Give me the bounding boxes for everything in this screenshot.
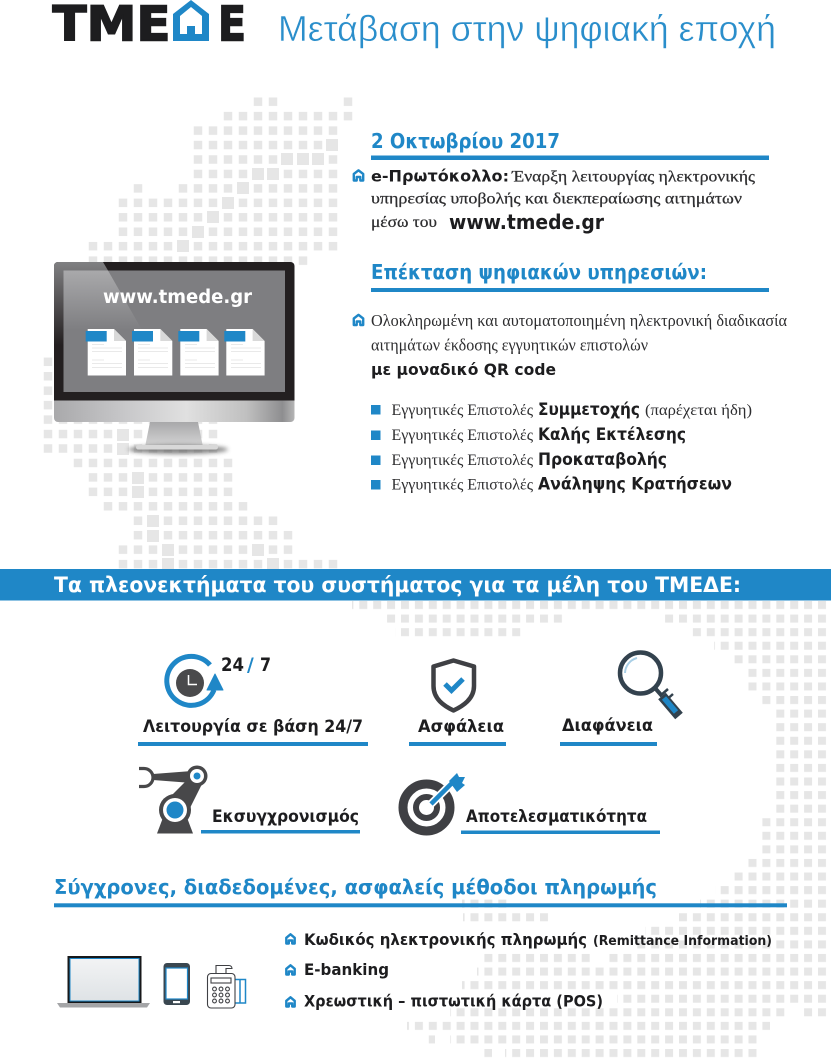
panel: digital services expansion <box>354 260 787 494</box>
document 4 <box>224 329 265 376</box>
list item: advance payment <box>371 450 667 469</box>
list item: participation: Συμμετοχής <box>538 400 640 419</box>
icon: house bullet <box>354 315 363 325</box>
monitor chin <box>54 400 294 422</box>
panel: modernisation <box>139 766 360 834</box>
text: 7: 7 <box>260 655 271 676</box>
heading: payment methods <box>54 875 787 907</box>
panel: 24/7 operation <box>138 655 368 746</box>
monitor address: www.tmede.gr <box>103 287 253 308</box>
list item: good performance: Εγγυητικές Επιστολές <box>392 427 534 444</box>
icon: laptop <box>57 957 150 1008</box>
list item: advance payment: Εγγυητικές Επιστολές <box>392 452 534 469</box>
text: 24: 24 <box>221 655 244 676</box>
list item: remittance code: (Remittance Information) <box>593 933 772 949</box>
text: description line 2: αιτημάτων έκδοσης εγγυητικών επιστολών <box>371 336 649 354</box>
panel: monitor illustration <box>54 262 294 454</box>
list item: withholdings <box>371 474 732 494</box>
list item: good performance <box>371 425 686 444</box>
list item: remittance code: Κωδικός ηλεκτρονικής πληρωμής <box>304 930 587 949</box>
list item: POS card: Χρεωστική – πιστωτική κάρτα (POS) <box>304 992 603 1010</box>
text: slash: / <box>247 655 254 676</box>
document 2 <box>132 329 172 376</box>
list item: advance payment: Προκαταβολής <box>538 450 667 469</box>
text: e-protocol description line 2: υπηρεσίας υποβολής και διεκπεραίωσης αιτημάτων <box>371 190 742 208</box>
monitor stand <box>145 422 203 447</box>
label: Λειτουργία σε βάση 24/7 <box>143 717 363 737</box>
title: Μετάβαση στην ψηφιακή εποχή <box>278 8 776 49</box>
document 3 <box>178 329 219 376</box>
panel: 2 October 2017 <box>354 129 769 234</box>
panel: efficiency <box>403 773 660 834</box>
text: e-protocol: e-Πρωτόκολλο: <box>371 168 509 186</box>
text: via: μέσω του <box>371 214 437 231</box>
heading: expansion: Επέκταση ψηφιακών υπηρεσιών: <box>371 260 707 284</box>
text: description line 1: Ολοκληρωμένη και αυτοματοποιημένη ηλεκτρονική διαδικασία <box>371 311 787 330</box>
icon: clock with arrow <box>167 656 223 705</box>
list item: good performance: Καλής Εκτέλεσης <box>538 425 686 444</box>
list item: remittance code <box>286 930 772 949</box>
text: QR code: με μοναδικό QR code <box>371 360 556 379</box>
icon: robot arm <box>139 766 208 834</box>
text: url: www.tmede.gr <box>449 210 605 234</box>
document 1 <box>86 329 126 376</box>
screen reflection <box>64 270 142 330</box>
heading: date: 2 Οκτωβρίου 2017 <box>371 129 560 153</box>
icon: house bullet <box>354 170 363 180</box>
logo: TMEDE <box>52 0 246 52</box>
list item: e-banking: E-banking <box>304 960 389 979</box>
bezel reflection <box>54 262 108 345</box>
banner: system advantages: Τα πλεονεκτήματα του συστήματος για τα μέλη του ΤΜΕΔΕ: <box>54 573 741 597</box>
icon: logo house <box>173 0 209 41</box>
icon: magnifier <box>620 652 679 716</box>
list item: participation: Εγγυητικές Επιστολές <box>392 402 534 419</box>
icon: POS terminal <box>208 966 246 1008</box>
list item: withholdings: Ανάληψης Κρατήσεων <box>538 474 732 494</box>
icon: shield <box>434 660 474 710</box>
label: Εκσυγχρονισμός <box>212 807 359 827</box>
icon: target with arrow <box>403 773 465 831</box>
label: Ασφάλεια <box>418 717 504 737</box>
monitor bezel <box>54 262 294 400</box>
list item: participation <box>371 400 752 419</box>
heading: payment methods: Σύγχρονες, διαδεδομένες, ασφαλείς μέθοδοι πληρωμής <box>54 875 657 899</box>
monitor screen <box>64 270 285 392</box>
label: Αποτελεσματικότητα <box>466 807 647 827</box>
text: e-protocol description line 1: Έναρξη λειτουργίας ηλεκτρονικής <box>511 168 756 186</box>
panel: security <box>409 660 506 746</box>
list item: withholdings: Εγγυητικές Επιστολές <box>392 476 534 494</box>
monitor base <box>128 445 228 454</box>
panel: transparency <box>560 652 679 746</box>
icon: phone <box>164 963 190 1005</box>
list item: participation: (παρέχεται ήδη) <box>645 402 752 419</box>
banner: system advantages <box>0 569 831 600</box>
label: Διαφάνεια <box>562 716 653 736</box>
